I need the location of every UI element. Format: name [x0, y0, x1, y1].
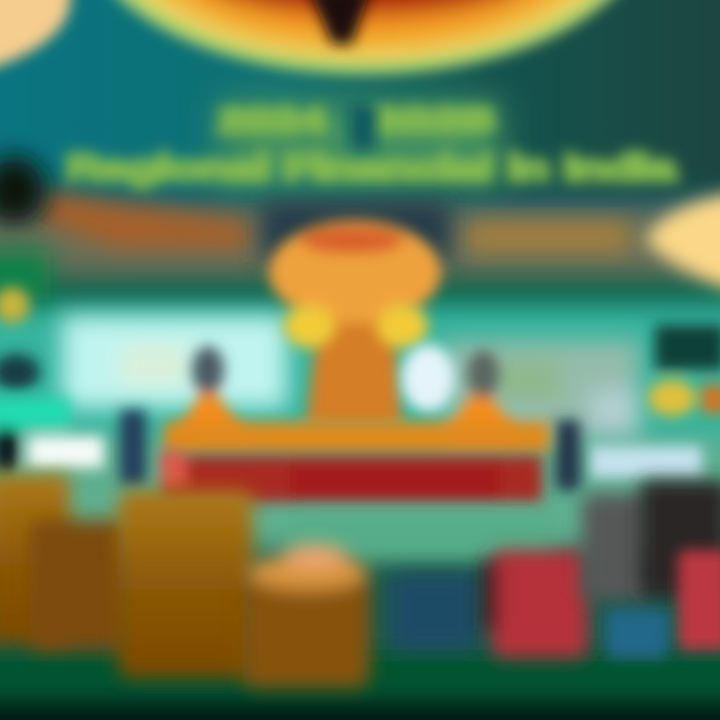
- red stack: right: [678, 550, 720, 650]
- corner blob: top left: [0, 0, 71, 72]
- blue stack: right: [606, 610, 668, 658]
- coin stack: front: [242, 544, 370, 688]
- right accents: [590, 325, 720, 478]
- heading glow: [220, 100, 500, 185]
- black stack: [640, 480, 720, 598]
- table: [160, 422, 550, 502]
- top emblem: green ring with orange sunburst: [80, 0, 650, 75]
- coin stack: far left: [0, 474, 70, 644]
- panel: right subheading strip: [465, 222, 630, 252]
- red stack: [482, 550, 588, 658]
- screen panel: right: [445, 340, 640, 440]
- coin stack: second: [30, 520, 130, 650]
- heading dark notch: [350, 104, 376, 150]
- left accents: [0, 287, 104, 474]
- gray stack: [582, 494, 652, 600]
- presenter figures: [120, 346, 580, 490]
- light spot: [401, 344, 455, 412]
- dome: [269, 220, 441, 324]
- sunburst: [120, 0, 610, 48]
- trunk: [306, 290, 402, 425]
- dark halo: [262, 203, 450, 262]
- blue stack: [390, 574, 478, 650]
- heading: 2024: [218, 102, 326, 140]
- central figure: dome and trunk: [262, 203, 455, 425]
- dome lights: [284, 304, 428, 348]
- table top: [165, 422, 550, 452]
- dark centre wedge: [308, 0, 372, 44]
- heading: [66, 102, 677, 188]
- screen panel: left: [62, 316, 287, 408]
- coin stack: tall: [118, 490, 253, 678]
- dark patch: left edge: [0, 156, 50, 300]
- upper band backdrop: [0, 192, 720, 720]
- corner blob: right: [645, 192, 720, 292]
- panel: left subheading strip: [42, 190, 250, 250]
- heading: Regional Financial in India: [66, 147, 677, 188]
- green floor under table: [290, 515, 555, 560]
- ring: [80, 0, 650, 75]
- heading: 2025: [368, 102, 494, 140]
- table front: [160, 450, 542, 502]
